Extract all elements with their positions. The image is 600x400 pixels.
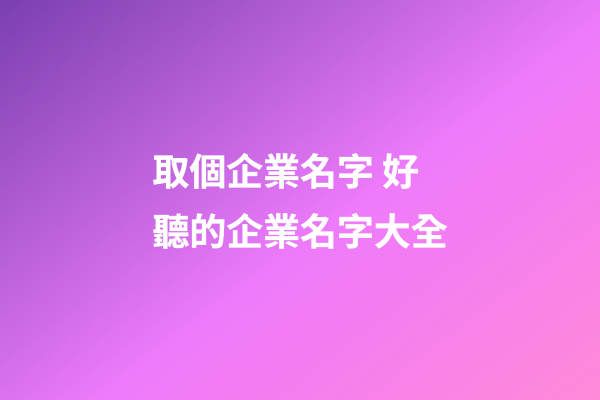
title bbox=[152, 152, 448, 252]
title: 聽的企業名字大全 bbox=[152, 212, 448, 252]
title: 取個企業名字 好 bbox=[152, 152, 419, 192]
